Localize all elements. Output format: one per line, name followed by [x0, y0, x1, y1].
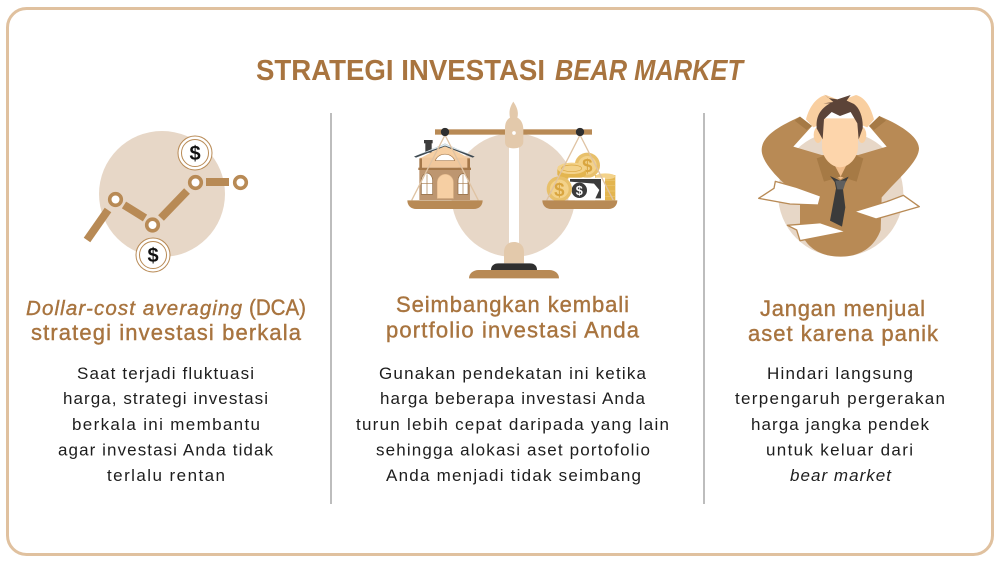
- text block: do not panic sell: untuk keluar dari: [766, 440, 913, 460]
- title: STRATEGI INVESTASI: [256, 55, 545, 87]
- pans: [407, 200, 483, 209]
- heading: rebalance portfolio: [386, 292, 640, 342]
- heading: rebalance portfolio: portfolio investasi Anda: [386, 318, 640, 342]
- house: [414, 140, 475, 200]
- hair: [817, 94, 863, 139]
- text block: dollar-cost averaging: Saat terjadi fluktuasi: [77, 364, 254, 383]
- panel: do not panic sell: [735, 94, 945, 485]
- icon: price line chart with dollar coins: $: [147, 245, 159, 267]
- text block: do not panic sell: bear market: [790, 466, 892, 485]
- strings: [412, 135, 613, 200]
- coins and banknote: $: [582, 155, 593, 176]
- ears and face: [814, 127, 822, 143]
- text block: rebalance portfolio: Anda menjadi tidak seimbang: [386, 466, 641, 485]
- text block: dollar-cost averaging: [58, 364, 274, 485]
- heading: dollar-cost averaging: strategi investasi berkala: [31, 320, 302, 345]
- heading: do not panic sell: aset karena panik: [748, 321, 939, 346]
- title: BEAR MARKET: [555, 55, 745, 87]
- text block: rebalance portfolio: harga beberapa investasi Anda: [380, 389, 646, 408]
- hands: [806, 95, 841, 127]
- text block: rebalance portfolio: Gunakan pendekatan ini ketika: [379, 364, 647, 383]
- text block: dollar-cost averaging: agar investasi Anda tidak: [58, 440, 274, 460]
- collar: [817, 154, 841, 182]
- text block: dollar-cost averaging: harga, strategi investasi: [63, 389, 268, 408]
- text block: dollar-cost averaging: terlalu rentan: [107, 466, 225, 485]
- text block: do not panic sell: terpengaruh pergerakan: [735, 389, 945, 408]
- icon: price line chart with dollar coins: $: [189, 143, 201, 165]
- torso and arms: [762, 116, 919, 257]
- heading: dollar-cost averaging: (DCA): [249, 295, 306, 320]
- coins and banknote: $: [554, 179, 565, 200]
- text block: rebalance portfolio: [356, 364, 669, 485]
- heading: rebalance portfolio: Seimbangkan kembali: [396, 292, 629, 317]
- panel: dollar-cost averaging: [26, 131, 306, 485]
- heading: dollar-cost averaging: Dollar-cost averaging: [26, 297, 243, 320]
- tie: [830, 176, 849, 227]
- icon: price line chart with dollar coins: [87, 131, 246, 272]
- text block: do not panic sell: Hindari langsung: [767, 364, 913, 383]
- heading: dollar-cost averaging: [26, 295, 306, 345]
- coins and banknote: [547, 153, 615, 202]
- neck: [827, 157, 854, 179]
- text block: rebalance portfolio: sehingga alokasi aset portofolio: [376, 440, 650, 460]
- icon: stressed man with flying papers: [759, 94, 919, 257]
- heading: do not panic sell: Jangan menjual: [760, 296, 925, 321]
- heading: do not panic sell: [748, 296, 939, 346]
- papers: [759, 181, 821, 205]
- text block: dollar-cost averaging: berkala ini membantu: [72, 415, 260, 434]
- panel: rebalance portfolio: [356, 102, 669, 485]
- text block: do not panic sell: harga jangka pendek: [751, 415, 930, 434]
- icon: balance scale with house and coins: [407, 102, 617, 278]
- beam: [435, 129, 592, 135]
- text block: rebalance portfolio: turun lebih cepat daripada yang lain: [356, 415, 669, 434]
- text block: do not panic sell: [735, 364, 945, 485]
- coins and banknote: $: [576, 184, 583, 198]
- title: [256, 55, 745, 87]
- column: [509, 145, 519, 245]
